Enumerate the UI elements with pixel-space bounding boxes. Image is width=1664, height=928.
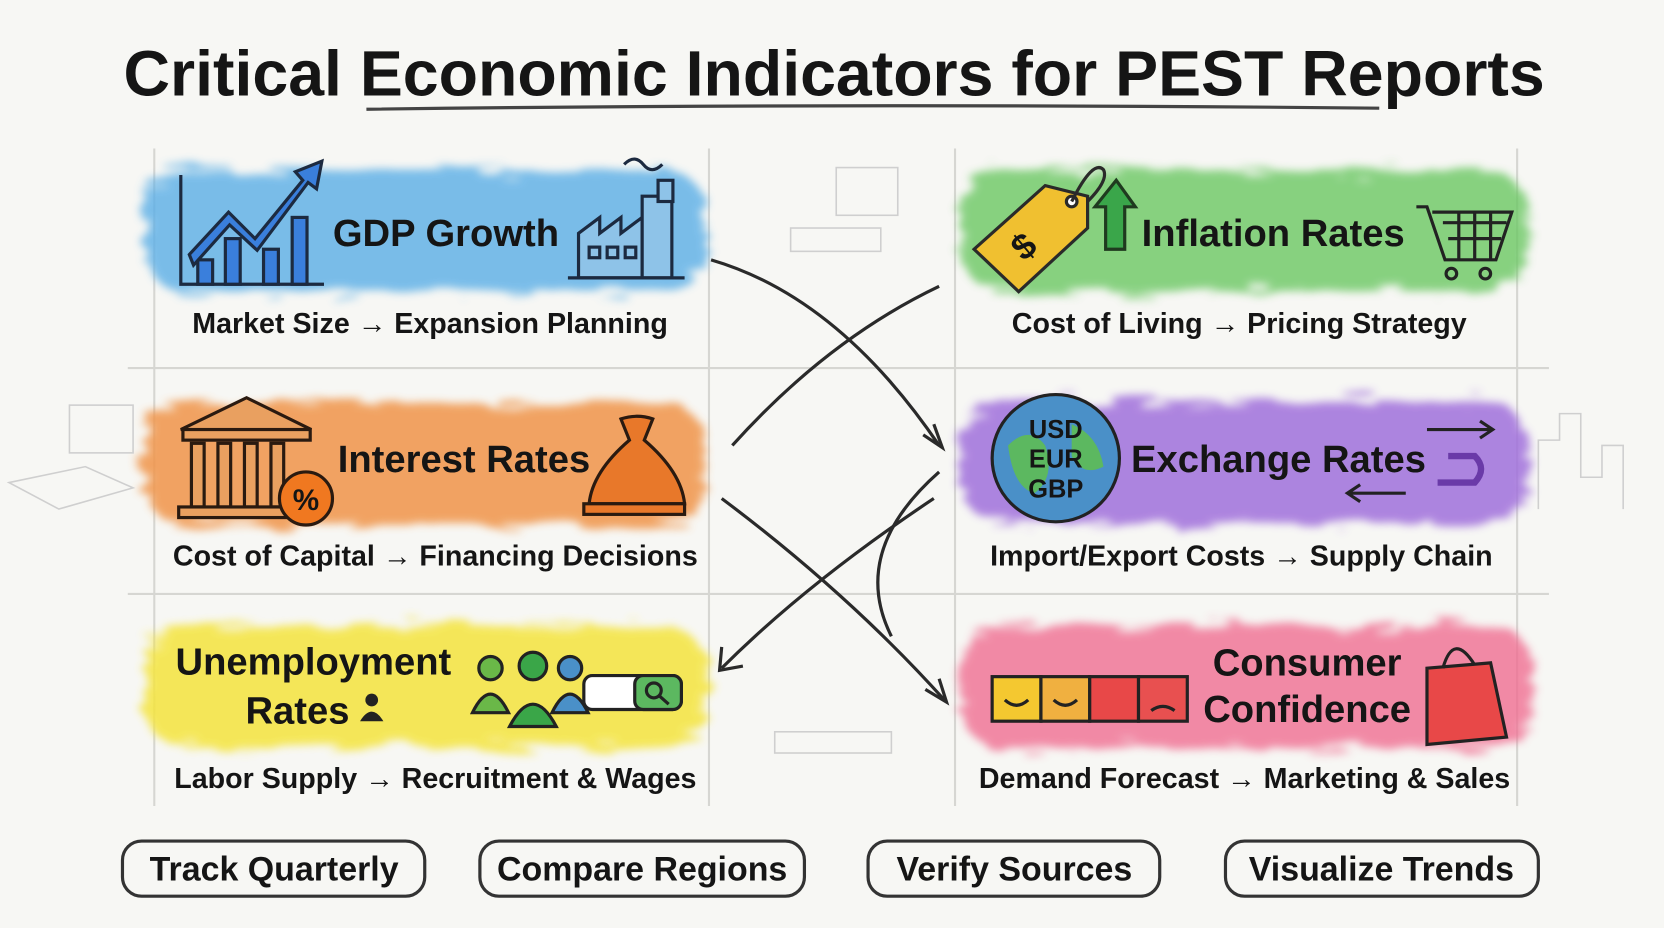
- subtitle: Labor Supply → Recruitment & Wages: [174, 763, 696, 795]
- panel: GDP Growth: [144, 159, 706, 340]
- icon: globe: EUR: [1029, 446, 1083, 474]
- subtitle: Cost of Capital → Financing Decisions: [173, 540, 698, 572]
- panel: Unemployment Rates: Unemployment: [176, 641, 452, 684]
- panel: Consumer Confidence: [960, 626, 1533, 795]
- icon: growth chart: [181, 161, 324, 284]
- button: Verify Sources: [868, 841, 1160, 896]
- button: Track Quarterly: [122, 841, 425, 896]
- icon: price tag: $: [1003, 224, 1044, 268]
- subtitle: Import/Export Costs → Supply Chain: [990, 540, 1493, 572]
- decorative sketches: [9, 168, 1623, 753]
- icon: factory: [568, 159, 685, 278]
- panel: GDP Growth: GDP Growth: [333, 212, 559, 255]
- icon: globe: GBP: [1028, 475, 1083, 503]
- panel: Consumer Confidence: Consumer: [1213, 642, 1402, 685]
- icon: shopping bag: [1427, 649, 1507, 745]
- panel: Unemployment Rates: [144, 626, 706, 795]
- button: Compare Regions: [480, 841, 804, 896]
- button: Visualize Trends: [1225, 841, 1538, 896]
- subtitle: Demand Forecast → Marketing & Sales: [979, 763, 1510, 795]
- subtitle: Market Size → Expansion Planning: [192, 308, 668, 340]
- grid lines: [128, 148, 1549, 806]
- subtitle: Cost of Living → Pricing Strategy: [1012, 308, 1467, 340]
- icon: exchange arrows: [1347, 421, 1493, 502]
- button: Compare Regions: Compare Regions: [497, 850, 787, 888]
- panel: Unemployment Rates: Rates: [245, 689, 349, 732]
- icon: bank: %: [293, 484, 319, 517]
- arrows: crossing connections: [711, 260, 947, 702]
- button: Visualize Trends: Visualize Trends: [1249, 850, 1514, 888]
- icon: money bag: [584, 416, 685, 514]
- icon: globe: [992, 395, 1119, 522]
- panel: Exchange Rates: [960, 395, 1528, 572]
- icon: sentiment meter: [992, 677, 1187, 721]
- icon: person: [360, 694, 383, 721]
- icon: cart: [1416, 207, 1512, 279]
- panel: Inflation Rates: [960, 168, 1528, 340]
- icon: people search: [472, 652, 681, 726]
- panel: Exchange Rates: Exchange Rates: [1131, 438, 1426, 481]
- button: Verify Sources: Verify Sources: [897, 850, 1132, 888]
- panel: Inflation Rates: Inflation Rates: [1142, 212, 1405, 255]
- panel: Interest Rates: Interest Rates: [338, 438, 590, 481]
- icon: price tag: [974, 168, 1105, 292]
- title: Critical Economic Indicators for PEST Reports: [124, 38, 1545, 109]
- icon: up arrow: [1095, 180, 1135, 249]
- panel: Interest Rates: [144, 398, 706, 572]
- icon: bank: [179, 398, 332, 525]
- button: Track Quarterly: Track Quarterly: [150, 850, 399, 888]
- panel: Consumer Confidence: Confidence: [1203, 688, 1411, 731]
- icon: globe: USD: [1029, 416, 1083, 444]
